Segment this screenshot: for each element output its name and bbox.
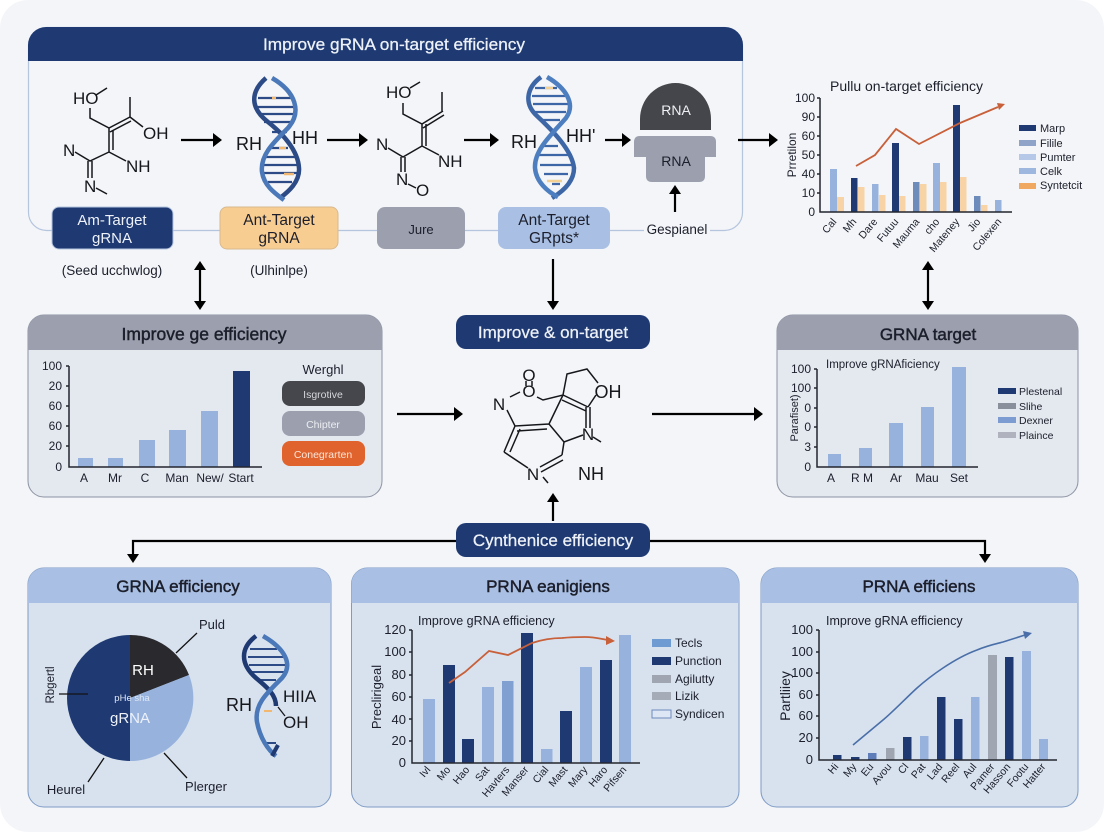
bar chart: Ar <box>890 471 902 485</box>
y tick labels <box>795 91 815 219</box>
x labels: Hatter <box>1021 761 1049 791</box>
label: Gespianel: Gespianel <box>647 222 707 237</box>
arrow: main to right chart <box>738 133 778 147</box>
x labels <box>820 216 1004 255</box>
panel header: Improve gRNA on-target efficiency: Improve gRNA on-target efficiency <box>263 36 526 54</box>
y tick labels: 10 <box>802 186 815 200</box>
central molecule: OH <box>594 382 622 402</box>
legend: Filile <box>1040 138 1063 150</box>
x labels: Hi <box>826 761 841 777</box>
label chip 3 <box>377 207 465 249</box>
molecule 2: HO <box>386 83 412 102</box>
pill: Improve & on-target: Improve & on-target <box>478 323 628 342</box>
legend button 1: Isgrotive <box>303 389 343 401</box>
molecule 1: HO <box>73 89 98 108</box>
bar chart: 0 <box>804 460 811 474</box>
DNA helix 2 <box>511 77 595 198</box>
DNA helix 1: HH <box>292 128 318 148</box>
legend: Syntetcit <box>1040 180 1082 192</box>
bar chart: 100 <box>384 644 406 659</box>
arrow up <box>669 185 681 212</box>
arrow <box>327 133 368 147</box>
panel: GRNA efficiency <box>28 568 331 807</box>
panel header: Improve ge efficiency <box>121 324 287 344</box>
x labels: Mauma <box>891 216 922 251</box>
bar chart: Start <box>228 471 254 485</box>
bar chart: 60 <box>799 687 813 702</box>
bar chart: 100 <box>791 644 813 659</box>
bar chart: 100 <box>791 362 811 376</box>
x labels: Cal <box>820 216 839 236</box>
label chip 4: GRpts* <box>529 230 579 247</box>
bar chart: 100 <box>791 381 811 395</box>
central molecule: N <box>582 425 594 444</box>
x labels: Aul <box>960 761 979 781</box>
legend: Agilutty <box>675 672 714 686</box>
arrow: left panel to molecule <box>397 407 463 421</box>
pie chart: pHe sha <box>114 693 150 704</box>
bar chart: 100 <box>791 622 813 637</box>
molecule 2: O <box>416 181 429 200</box>
y tick labels: 0 <box>808 205 815 219</box>
bar chart: 100 <box>791 665 813 680</box>
arrow <box>605 133 631 147</box>
pie label: Rbgertl: Rbgertl <box>45 666 57 704</box>
bar chart <box>777 622 1057 767</box>
arrow: down centre <box>547 259 559 310</box>
legend button 2 <box>282 411 365 436</box>
bar chart: Parafiset) <box>789 394 801 442</box>
pill: Cynthenice efficiency: Cynthenice efficiency <box>473 531 634 550</box>
legend: Dexner <box>1019 415 1053 427</box>
bar chart: 0 <box>806 752 813 767</box>
x labels: Mast <box>546 764 570 789</box>
caption: seed: (Seed ucchwlog) <box>62 263 162 278</box>
label chip 2: gRNA <box>258 230 300 247</box>
legend: Lizik <box>675 689 700 703</box>
central molecule: O <box>522 382 536 401</box>
pill: Improve & on-target <box>456 315 650 349</box>
label chip 1: Am-Target <box>77 212 147 229</box>
central molecule: O <box>522 366 536 385</box>
panel header <box>777 315 1078 350</box>
pill: Cynthenice efficiency <box>456 523 650 557</box>
bar chart: C <box>141 471 150 485</box>
bar chart <box>42 359 262 485</box>
RNA base <box>634 136 716 182</box>
axes <box>817 98 1012 212</box>
bar chart: 60 <box>49 419 62 433</box>
pie chart: RH <box>132 662 154 679</box>
y tick labels: 90 <box>802 110 815 124</box>
x labels: Sat <box>473 764 492 784</box>
DNA helix 2: RH <box>511 132 537 152</box>
DNA helix 1 <box>236 78 318 200</box>
y tick labels: 100 <box>795 91 815 105</box>
x labels: Mh <box>841 216 859 235</box>
bar chart: 0 <box>804 401 811 415</box>
legend button 3: Conegrarten <box>294 449 352 461</box>
central molecule <box>493 366 622 484</box>
arrow: up to molecule <box>547 493 559 521</box>
x labels: Havters <box>480 764 512 800</box>
bar chart: 20 <box>49 439 62 453</box>
panel: top workflow <box>28 27 743 249</box>
legend button 1 <box>282 381 365 406</box>
pie label: Plerger <box>164 753 228 794</box>
x labels: Ivl <box>417 764 433 780</box>
arrow <box>181 133 222 147</box>
x labels: Futuu <box>875 216 901 245</box>
arrow: double left <box>194 261 206 310</box>
x labels: Cl <box>896 761 911 777</box>
bar chart: 80 <box>392 667 406 682</box>
bar chart: 100 <box>42 359 62 373</box>
y axis title: Prretilon <box>785 133 799 177</box>
bar chart: 60 <box>49 399 62 413</box>
legend button 2: Chipter <box>306 419 340 431</box>
legend: Tecls <box>675 636 702 650</box>
x labels: Mary <box>566 764 591 790</box>
x labels: Dare <box>856 216 880 241</box>
molecule 2: N <box>376 135 388 154</box>
bars <box>830 105 1002 212</box>
chart title: Improve gRNA efficiency <box>418 614 555 628</box>
label chip 2: Ant-Target <box>243 212 315 229</box>
x labels: Eu <box>859 761 876 779</box>
DNA helix 2: HH' <box>566 126 595 146</box>
panel header <box>352 568 739 603</box>
bar chart: Partliiey <box>777 671 793 721</box>
bar chart: 20 <box>49 379 62 393</box>
legend: Celk <box>1040 166 1063 178</box>
x labels: Hao <box>451 764 472 787</box>
chart title: Improve gRNAficiency <box>826 359 940 371</box>
bar chart: R M <box>851 471 873 485</box>
label chip 2 <box>220 207 338 249</box>
bar chart: 3 <box>804 440 811 454</box>
pie label: Heurel <box>47 758 104 797</box>
arrow: molecule to right panel <box>652 407 763 421</box>
bar chart: 40 <box>392 712 406 727</box>
molecule 1: OH <box>143 124 168 143</box>
x labels: Mo <box>435 764 453 783</box>
legend <box>998 386 1062 442</box>
arrow: double right <box>922 261 934 310</box>
legend: Punction <box>675 654 722 668</box>
bar chart: Set <box>950 471 969 485</box>
bar chart: A <box>80 471 88 485</box>
x labels: Avou <box>870 761 894 787</box>
bar chart: 0 <box>399 755 406 770</box>
trend line <box>856 103 1005 166</box>
pie label: Heurel: Heurel <box>47 782 85 797</box>
DNA helix 3 <box>226 636 317 756</box>
bar chart: 0 <box>804 420 811 434</box>
bar chart <box>369 622 640 770</box>
bar chart: New/ <box>196 471 224 485</box>
RNA dome: RNA <box>661 102 691 118</box>
panel: Improve ge efficiency <box>28 315 382 497</box>
bar chart: Man <box>165 471 189 485</box>
RNA dome <box>640 83 711 130</box>
x labels: Jio <box>965 216 983 234</box>
molecule 1: N <box>63 141 75 160</box>
panel header: PRNA efficiens <box>862 577 976 596</box>
RNA base: RNA <box>661 153 691 169</box>
x labels: Pifsen <box>601 764 629 794</box>
molecule 1: NH <box>126 157 151 176</box>
x labels: Haro <box>586 764 610 789</box>
bar chart: 60 <box>799 708 813 723</box>
legend <box>652 636 724 721</box>
molecule 1 <box>63 88 168 196</box>
panel header: Improve gRNA on-target efficiency <box>28 27 743 61</box>
panel header: PRNA eanigiens <box>486 577 610 596</box>
arrow <box>464 133 499 147</box>
label chip 3: Jure <box>408 222 434 237</box>
x labels: Mateney <box>927 216 963 255</box>
legend: Plestenal <box>1019 386 1062 398</box>
bar chart <box>789 362 978 485</box>
y tick labels: 50 <box>802 148 815 162</box>
pie chart <box>67 635 193 761</box>
central molecule: NH <box>578 464 604 484</box>
panel header <box>28 315 382 350</box>
x labels: Colexen <box>970 216 1004 253</box>
pie chart: gRNA <box>110 710 150 727</box>
molecule 2 <box>376 82 463 200</box>
legend: Pumter <box>1040 152 1076 164</box>
panel: PRNA efficiens <box>761 568 1078 807</box>
chart: top right <box>785 78 1082 255</box>
bar chart: 20 <box>392 733 406 748</box>
x labels: cho <box>922 216 942 237</box>
panel header: GRNA target <box>880 325 976 344</box>
x labels: Cial <box>530 764 551 786</box>
chart title: Pullu on-target efficiency <box>830 78 983 94</box>
x labels: Manser <box>500 764 532 799</box>
central molecule: N <box>493 395 505 414</box>
x labels: Reel <box>939 761 962 785</box>
connector to left and right bottom panels <box>127 541 991 563</box>
bar chart: A <box>827 471 835 485</box>
DNA helix 3: HIIA <box>283 687 317 706</box>
legend <box>1019 123 1082 192</box>
bar chart: Preclirigeal <box>369 665 384 729</box>
y tick labels: 40 <box>802 167 815 181</box>
DNA helix 3: RH <box>226 695 252 715</box>
bar chart: Mau <box>915 471 939 485</box>
legend: Marp <box>1040 123 1065 135</box>
x labels: Pat <box>909 761 928 781</box>
bar chart: Mr <box>108 471 122 485</box>
bar chart: 120 <box>384 622 406 637</box>
panel header <box>761 568 1078 603</box>
panel: PRNA eanigiens <box>352 568 739 807</box>
x labels <box>826 761 1049 796</box>
bar chart: 60 <box>392 689 406 704</box>
pie label: Puld <box>176 617 225 653</box>
central molecule: N <box>527 465 539 484</box>
x labels <box>417 764 629 800</box>
panel: GRNA target <box>777 315 1078 497</box>
x labels: Footu <box>1005 761 1031 790</box>
label chip 1: gRNA <box>92 230 132 247</box>
chart title: Improve gRNA efficiency <box>826 614 963 628</box>
legend button 3 <box>282 441 365 466</box>
x labels: Lad <box>925 761 945 782</box>
x labels: My <box>841 761 860 780</box>
molecule 2: NH <box>438 152 463 171</box>
trend line <box>853 631 1032 745</box>
legend heading: Werghl <box>303 362 344 377</box>
panel header <box>28 568 331 603</box>
bar chart: 0 <box>55 460 62 474</box>
legend: Plaince <box>1019 430 1054 442</box>
trend line <box>449 636 615 683</box>
label chip 4: Ant-Target <box>518 212 590 229</box>
pie label: Plerger: Plerger <box>185 779 228 794</box>
y tick labels: 60 <box>802 129 815 143</box>
pie label: Puld: Puld <box>199 617 225 632</box>
x labels: Hasson <box>981 761 1013 796</box>
legend: Syndicen <box>675 707 724 721</box>
caption: ulhinlpe: (Ulhinlpe) <box>250 263 308 278</box>
DNA helix 1: RH <box>236 134 262 154</box>
DNA helix 3: OH <box>283 713 308 732</box>
label chip 4 <box>498 207 610 249</box>
bar chart: 20 <box>799 730 813 745</box>
molecule 1: N <box>84 177 96 196</box>
x labels: Pamer <box>968 761 998 793</box>
molecule 2: N <box>396 170 408 189</box>
label chip 1 <box>52 207 173 249</box>
pie label: Rbgertl <box>45 666 88 704</box>
legend: Slihe <box>1019 401 1043 413</box>
panel header: GRNA efficiency <box>116 577 240 596</box>
